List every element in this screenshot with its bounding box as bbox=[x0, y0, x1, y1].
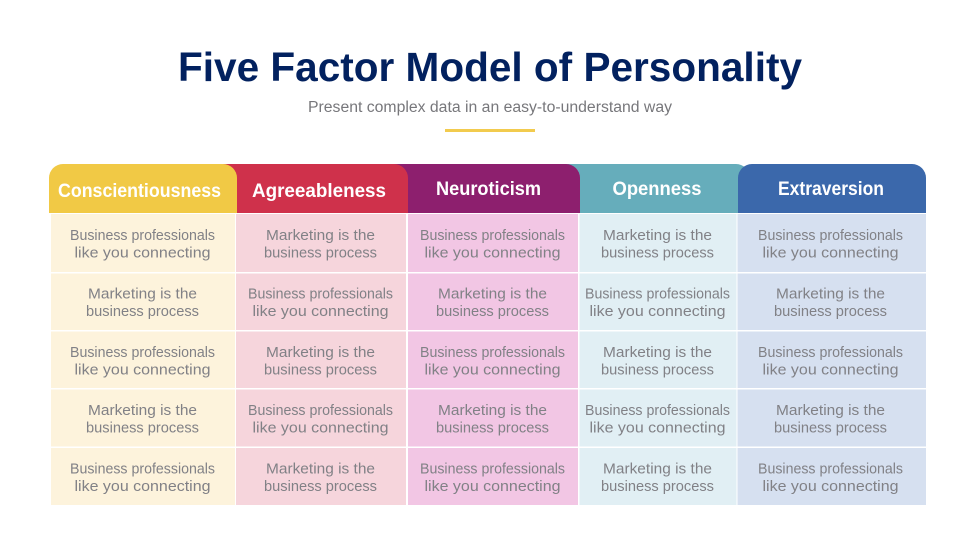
column: agreeableness cells: business process bbox=[264, 362, 377, 378]
column: conscientiousness cells bbox=[51, 214, 235, 505]
subtitle: Present complex data in an easy-to-understand way bbox=[308, 99, 672, 116]
column: neuroticism cells: like you connecting bbox=[424, 478, 560, 495]
column: conscientiousness cells: Business professionals bbox=[70, 344, 215, 361]
column: agreeableness cells: like you connecting bbox=[252, 303, 388, 320]
column: conscientiousness cells: business process bbox=[86, 303, 199, 320]
column: openness cells: like you connecting bbox=[590, 303, 726, 320]
column: agreeableness cells: Marketing is the bbox=[266, 227, 375, 244]
column: neuroticism cells: like you connecting bbox=[424, 362, 560, 378]
column: conscientiousness cells: like you connecting bbox=[74, 244, 210, 262]
column: neuroticism cells: like you connecting bbox=[424, 244, 560, 262]
column: openness cells: business process bbox=[601, 362, 714, 378]
column: openness cells: business process bbox=[601, 478, 714, 495]
column: agreeableness cells: business process bbox=[264, 478, 377, 495]
column: extraversion cells: like you connecting bbox=[762, 478, 898, 495]
column: agreeableness cells: like you connecting bbox=[252, 420, 388, 436]
column: extraversion cells: business process bbox=[774, 303, 887, 320]
column: openness cells: business process bbox=[601, 244, 714, 262]
column: conscientiousness cells: Marketing is the bbox=[88, 286, 197, 302]
column: neuroticism cells: Business professionals bbox=[420, 460, 565, 478]
header: conscientiousness: Conscientiousness bbox=[58, 181, 221, 202]
column: neuroticism cells: Business professionals bbox=[420, 227, 565, 244]
column: openness cells: Marketing is the bbox=[603, 460, 712, 478]
column: openness cells: Business professionals bbox=[585, 402, 730, 419]
header: agreeableness bbox=[220, 164, 408, 213]
column: extraversion cells: Marketing is the bbox=[776, 402, 885, 419]
column: openness cells: Marketing is the bbox=[603, 227, 712, 244]
title: Five Factor Model of Personality bbox=[178, 44, 802, 90]
column: conscientiousness cells: Business professionals bbox=[70, 227, 215, 244]
column: openness cells: Business professionals bbox=[585, 286, 730, 302]
column: conscientiousness cells: Marketing is the bbox=[88, 402, 197, 419]
column: extraversion cells: Marketing is the bbox=[776, 286, 885, 302]
column: openness cells: Marketing is the bbox=[603, 344, 712, 361]
header: extraversion: Extraversion bbox=[778, 179, 884, 200]
column: extraversion cells: like you connecting bbox=[762, 244, 898, 262]
column: conscientiousness cells: Business professionals bbox=[70, 460, 215, 478]
header: agreeableness: Agreeableness bbox=[252, 181, 386, 202]
column: agreeableness cells: Business professionals bbox=[248, 402, 393, 419]
column: neuroticism cells: Marketing is the bbox=[438, 402, 547, 419]
column: extraversion cells: Business professionals bbox=[758, 344, 903, 361]
header: openness: Openness bbox=[612, 179, 702, 200]
column: agreeableness cells bbox=[236, 214, 406, 505]
header: neuroticism: Neuroticism bbox=[436, 179, 541, 200]
column: agreeableness cells: Business professionals bbox=[248, 286, 393, 302]
column: extraversion cells: Business professionals bbox=[758, 227, 903, 244]
header: extraversion bbox=[738, 164, 926, 213]
column: extraversion cells: like you connecting bbox=[762, 362, 898, 378]
column: neuroticism cells bbox=[408, 214, 578, 505]
column: neuroticism cells: Marketing is the bbox=[438, 286, 547, 302]
column: agreeableness cells: Marketing is the bbox=[266, 344, 375, 361]
column: extraversion cells: Business professionals bbox=[758, 460, 903, 478]
column: openness cells bbox=[580, 214, 736, 505]
column: neuroticism cells: business process bbox=[436, 303, 549, 320]
header: conscientiousness bbox=[49, 164, 237, 213]
header: openness bbox=[560, 164, 750, 213]
title accent line bbox=[445, 129, 535, 132]
column: neuroticism cells: business process bbox=[436, 420, 549, 436]
column: conscientiousness cells: business process bbox=[86, 420, 199, 436]
column: extraversion cells bbox=[738, 214, 926, 505]
column: conscientiousness cells: like you connecting bbox=[74, 478, 210, 495]
column: neuroticism cells: Business professionals bbox=[420, 344, 565, 361]
column: agreeableness cells: business process bbox=[264, 244, 377, 262]
column: openness cells: like you connecting bbox=[590, 420, 726, 436]
column: extraversion cells: business process bbox=[774, 420, 887, 436]
column: conscientiousness cells: like you connecting bbox=[74, 362, 210, 378]
column: agreeableness cells: Marketing is the bbox=[266, 460, 375, 478]
header: neuroticism bbox=[390, 164, 580, 213]
